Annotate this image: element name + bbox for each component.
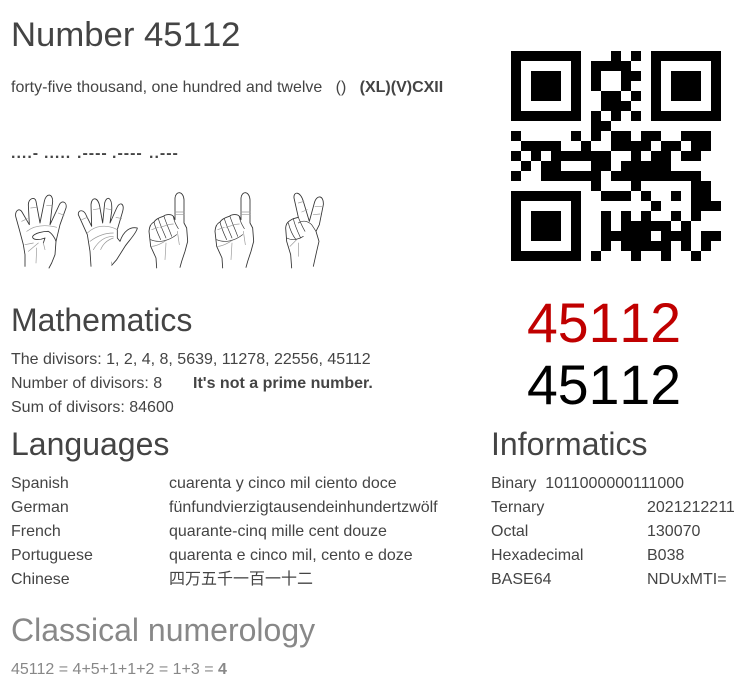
icon: sign language hands [15, 192, 324, 268]
base labels: BASE64 [491, 571, 551, 588]
base values [647, 499, 735, 588]
hand: five [78, 198, 137, 266]
base labels: Ternary [491, 499, 544, 516]
number of divisors and primality: It's not a prime number. [193, 375, 373, 392]
base values: B038 [647, 547, 684, 564]
language names: Spanish [11, 475, 69, 492]
sum of divisors: Sum of divisors: 84600 [11, 399, 174, 416]
heading: languages: Languages [11, 426, 169, 462]
red number: 45112 [527, 292, 681, 354]
numerology sum: 45112 = 4+5+1+1+2 = 1+3 = 4 [11, 661, 227, 678]
heading: informatics: Informatics [491, 426, 647, 462]
base values: 130070 [647, 523, 700, 540]
language names: Portuguese [11, 547, 93, 564]
number in words and roman numeral: forty-five thousand, one hundred and twelve () (XL)(V)CXII [11, 79, 443, 96]
translations: quarenta e cinco mil, cento e doze [169, 547, 413, 564]
number of divisors and primality: Number of divisors: 8 [11, 375, 162, 392]
QR code [511, 51, 721, 261]
morse code: ....- [11, 145, 39, 162]
heading: classical numerology: Classical numerology [11, 612, 315, 648]
black number: 45112 [527, 354, 681, 416]
base values: 2021212211 [647, 499, 735, 516]
translations: fünfundvierzigtausendeinhundertzwölf [169, 499, 438, 516]
morse code: .---- [77, 145, 108, 162]
title: Number 45112 [11, 16, 240, 54]
hand: one [149, 193, 188, 268]
language names: Chinese [11, 571, 70, 588]
translations [169, 475, 438, 588]
translations: 四万五千一百一十二 [169, 571, 313, 588]
hand: two [286, 193, 323, 268]
language names [11, 475, 93, 588]
number of divisors and primality [11, 375, 373, 392]
binary row: Binary 1011000000111000 [491, 475, 684, 492]
divisors: The divisors: 1, 2, 4, 8, 5639, 11278, 22556, 45112 [11, 351, 371, 368]
base labels: Hexadecimal [491, 547, 583, 564]
morse code: ..... [44, 145, 71, 162]
language names: German [11, 499, 69, 516]
base labels: Octal [491, 523, 528, 540]
base values: NDUxMTI= [647, 571, 727, 588]
panel: languages table [11, 475, 438, 588]
translations: quarante-cinq mille cent douze [169, 523, 387, 540]
morse code: ..--- [149, 145, 179, 162]
hand: one, repeated [215, 193, 254, 268]
hand: four [16, 195, 66, 268]
panel: mathematics facts [11, 351, 373, 416]
language names: French [11, 523, 61, 540]
base labels [491, 499, 583, 588]
heading: mathematics: Mathematics [11, 302, 192, 338]
morse code: .---- [112, 145, 143, 162]
morse code [11, 145, 179, 162]
translations: cuarenta y cinco mil ciento doce [169, 475, 397, 492]
panel: informatics table [491, 475, 735, 588]
